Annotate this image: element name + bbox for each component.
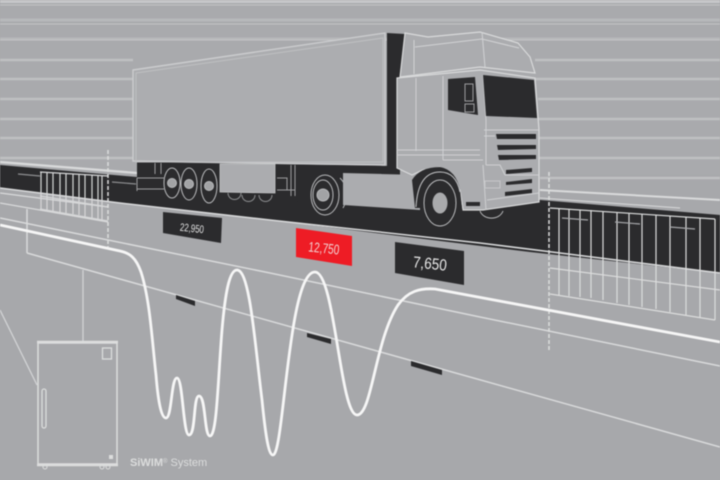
right fence — [550, 208, 720, 320]
dashed sensor markers — [108, 150, 549, 350]
road edge lines — [0, 162, 720, 447]
system label: SiWIM — [130, 457, 163, 469]
axle load: 7,650 — [395, 242, 464, 285]
system label: ® — [163, 458, 168, 465]
grille — [466, 134, 536, 206]
drive axle wheel — [311, 175, 346, 215]
trailer side skirt — [220, 164, 275, 193]
SiWIM cabinet — [37, 342, 118, 469]
truck — [133, 32, 539, 227]
system label: System — [167, 457, 207, 469]
cab body — [397, 70, 539, 210]
axle load: 22,950 — [163, 212, 222, 243]
side window — [448, 77, 478, 115]
trailer underframe — [137, 162, 400, 205]
front wheel and arch — [412, 167, 463, 227]
gap between trailer and cab — [387, 33, 405, 167]
trailer box — [133, 33, 385, 165]
left fence — [18, 172, 136, 221]
wires to cabinet — [0, 270, 83, 385]
cab roof fairing — [400, 32, 535, 77]
axle load: 12,750: 12,750 — [308, 238, 340, 258]
windshield — [483, 75, 537, 118]
strain signal wave — [0, 225, 720, 455]
headlight — [485, 181, 500, 188]
sensor strip 3 — [411, 361, 442, 375]
road surface — [0, 165, 720, 273]
rear tandem wheels — [137, 163, 295, 203]
tractor side skirt — [343, 173, 420, 210]
axle load: 7,650: 7,650 — [412, 254, 448, 275]
sensor strip 1 — [176, 295, 195, 306]
axle load: 12,750 — [296, 228, 352, 266]
axle load: 22,950: 22,950 — [179, 222, 204, 236]
far front wheel — [480, 211, 503, 218]
sensor strip 2 — [307, 333, 331, 344]
